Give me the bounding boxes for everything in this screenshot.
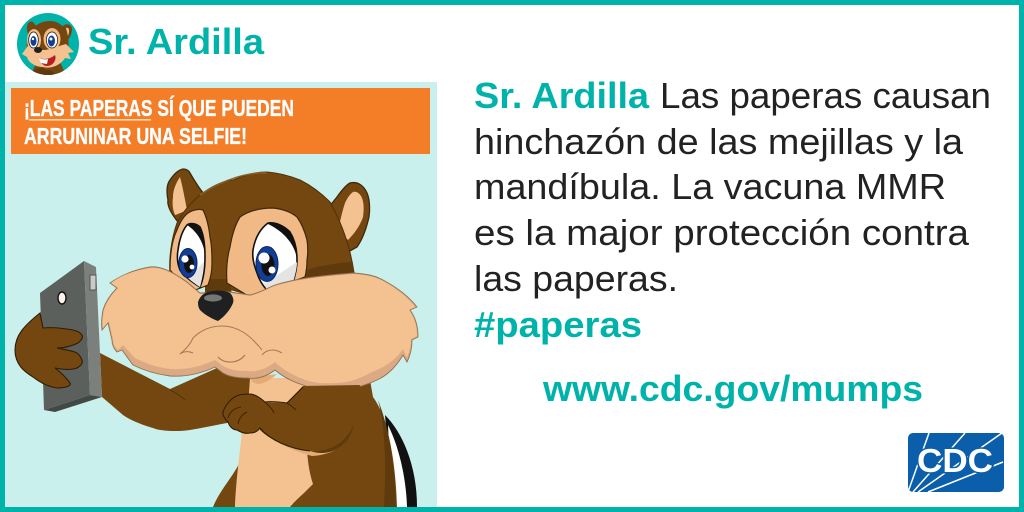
headline banner: [11, 88, 430, 154]
squirrel nose: [198, 291, 233, 321]
squirrel tail stripes: [385, 415, 417, 507]
left eye: [170, 209, 212, 292]
body message: Sr. Ardilla: [474, 75, 650, 116]
squirrel cheeks: [102, 267, 418, 390]
body message: [474, 75, 991, 299]
headline banner: ¡LAS PAPERAS SÍ QUE PUEDEN: [24, 94, 294, 121]
CDC logo: [908, 433, 1004, 492]
body message: es la major protección contra: [474, 212, 970, 253]
phone: [40, 261, 102, 412]
body message: hinchazón de las mejillas y la: [474, 121, 964, 162]
body message: mandíbula. La vacuna MMR: [474, 166, 946, 207]
squirrel hand on phone: [15, 313, 82, 388]
header name: Sr. Ardilla: [88, 21, 265, 62]
body message: Las paperas causan: [660, 75, 991, 116]
body message: las paperas.: [474, 258, 678, 299]
squirrel head: [170, 172, 355, 296]
avatar: Sr. Ardilla: [17, 13, 79, 75]
squirrel left ear: [167, 169, 204, 222]
illustration panel: [5, 82, 437, 507]
squirrel arm holding phone: [100, 353, 250, 431]
CDC logo: CDC: [917, 442, 993, 479]
squirrel right ear: [320, 183, 370, 252]
headline banner: ARRUNINAR UNA SELFIE!: [24, 123, 247, 149]
hashtag: #paperas: [474, 304, 642, 345]
squirrel folded arm: [223, 385, 360, 456]
squirrel body: [213, 374, 397, 507]
website link: www.cdc.gov/mumps: [542, 368, 923, 409]
right eye: [227, 208, 308, 297]
